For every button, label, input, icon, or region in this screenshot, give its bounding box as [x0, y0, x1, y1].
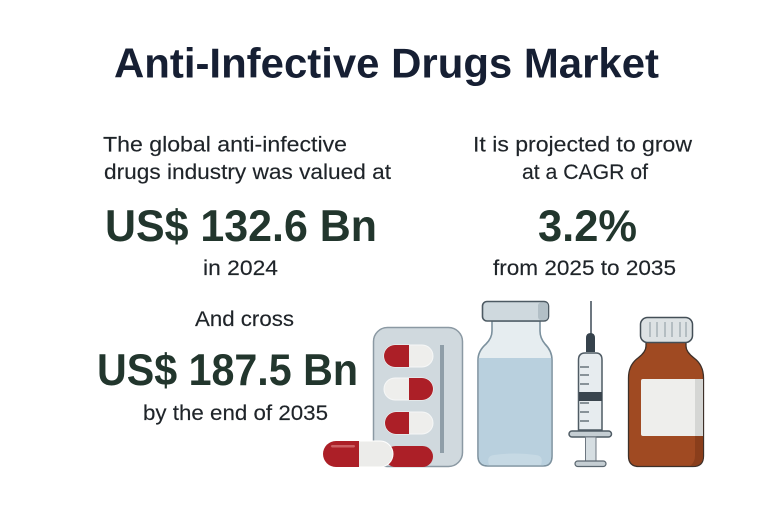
text block: 2024 market value [103, 132, 391, 280]
value: 3.2%: 3.2% [538, 202, 637, 251]
syringe hub [586, 333, 595, 352]
value: US$ 132.6 Bn: US$ 132.6 Bn [105, 202, 377, 251]
icon: blister pack with capsules [323, 328, 462, 467]
bottle body [628, 342, 704, 466]
dark plunger band [579, 392, 602, 401]
icon: amber medicine bottle [628, 318, 704, 466]
text block: CAGR [473, 132, 692, 280]
caption: in 2024: in 2024 [203, 256, 278, 280]
intro: And cross: And cross [195, 307, 294, 331]
plunger thumb rest [575, 461, 606, 466]
blister card [374, 328, 462, 466]
bottle right shading [690, 379, 703, 466]
vial liquid [479, 358, 551, 465]
bottle label [641, 379, 703, 436]
intro text: drugs industry was valued at [104, 160, 391, 184]
syringe barrel [578, 353, 602, 430]
needle [590, 301, 592, 334]
CAGR intro text [473, 132, 692, 184]
loose capsule [323, 441, 393, 467]
title: Anti-Infective Drugs Market [114, 40, 659, 86]
capsule 3 [385, 412, 433, 434]
text block: 2035 forecast [97, 307, 358, 425]
vial cap [482, 302, 548, 321]
capsule 4 [385, 446, 433, 467]
icon: glass vial [478, 302, 552, 466]
value: US$ 187.5 Bn: US$ 187.5 Bn [97, 346, 358, 395]
CAGR intro text: at a CAGR of [522, 160, 648, 184]
intro text: The global anti-infective [103, 132, 347, 156]
capsule 1 [384, 345, 433, 367]
finger flange [569, 431, 612, 437]
vial base highlight [488, 454, 542, 465]
label shadow [695, 379, 703, 436]
CAGR intro text: It is projected to grow [473, 132, 692, 156]
plunger rod [586, 437, 596, 461]
blister strip line [440, 345, 444, 453]
caption: by the end of 2035: by the end of 2035 [143, 401, 328, 425]
capsule 2 [384, 378, 433, 400]
bottle cap [640, 318, 692, 342]
vial body [478, 321, 552, 466]
barrel graduations [580, 367, 589, 421]
intro text [103, 132, 391, 184]
caption: from 2025 to 2035: from 2025 to 2035 [493, 256, 676, 280]
icon: syringe [569, 301, 612, 466]
